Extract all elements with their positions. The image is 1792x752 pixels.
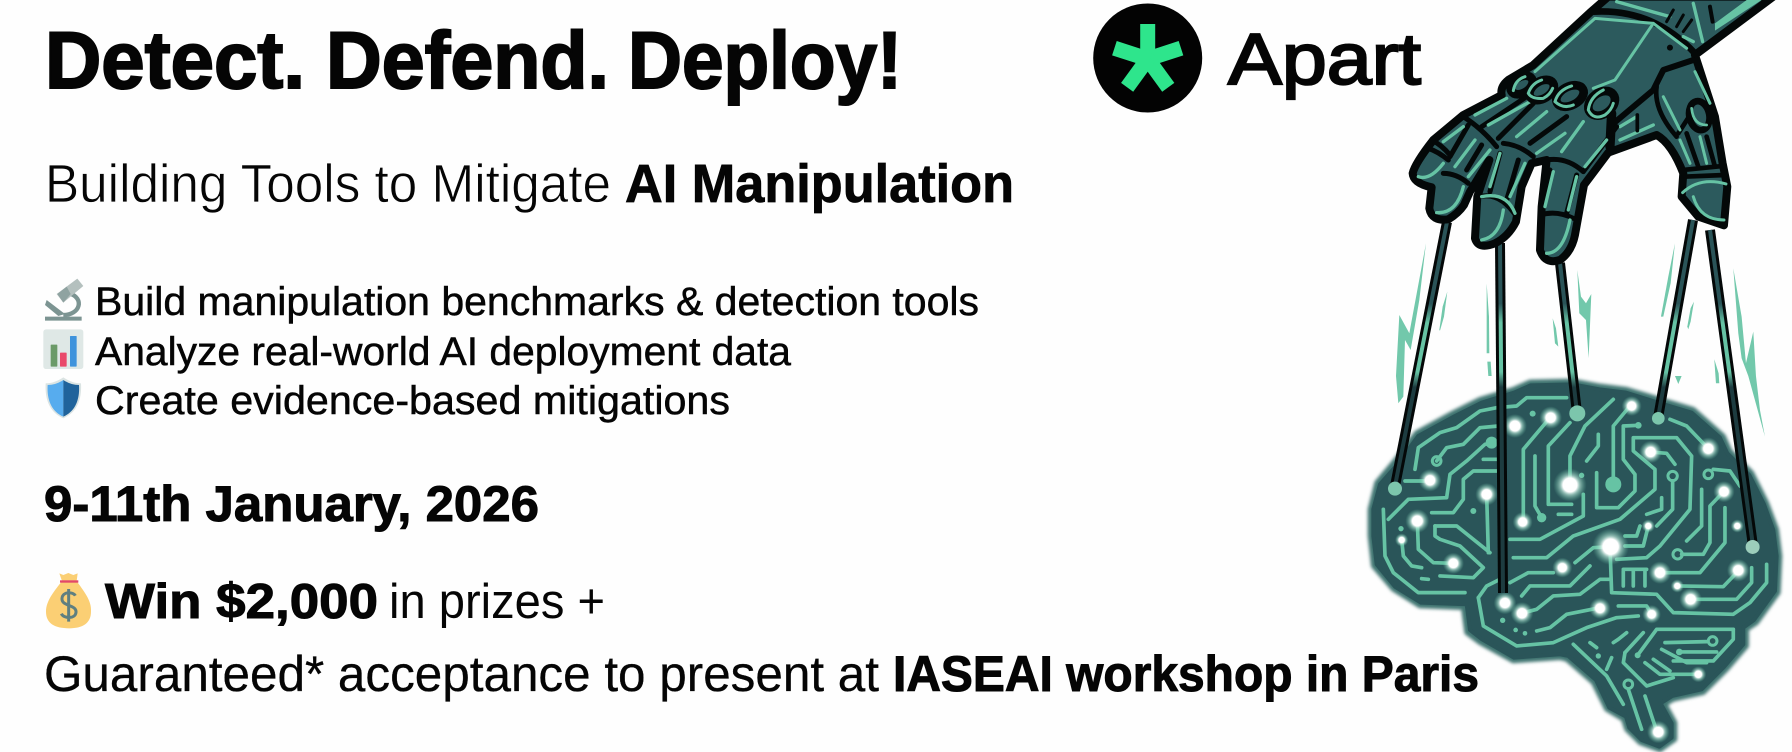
thumb: [1656, 72, 1726, 220]
prize line: in prizes +: [389, 575, 605, 629]
prize line: Win $2,000: [105, 575, 378, 629]
circuit traces: [1383, 398, 1767, 731]
workshop acceptance line: [44, 646, 1479, 702]
string 4: [1658, 220, 1693, 418]
lightning sparks: [1396, 243, 1765, 437]
icon: bar chart: [43, 329, 83, 369]
title: Defend.: [326, 16, 609, 106]
bullet: benchmarks: Build manipulation benchmarks & detection tools: [95, 280, 979, 324]
icon: shield: [46, 377, 81, 418]
logo wordmark: Apart: [1228, 20, 1421, 100]
robotic hand: [1413, 0, 1773, 261]
glowing nodes: [1395, 396, 1750, 743]
string anchor nodes: [1388, 405, 1760, 607]
puppet strings: [1395, 220, 1753, 593]
prize line: [105, 575, 605, 629]
subtitle: Building Tools to Mitigate: [45, 154, 611, 214]
palm and wrist details: [1535, 0, 1762, 147]
string 5: [1710, 230, 1753, 546]
icon: microscope: [45, 279, 83, 321]
workshop acceptance line: IASEAI workshop in Paris: [893, 646, 1479, 702]
icon: money bag: [46, 573, 91, 628]
title: Deploy!: [628, 16, 902, 106]
subtitle: [45, 154, 1014, 214]
string 1: [1395, 222, 1447, 486]
ring nodes: [1432, 457, 1717, 689]
bullet: mitigations: Create evidence-based mitigations: [95, 379, 730, 423]
workshop acceptance line: Guaranteed* acceptance to present at: [44, 646, 879, 702]
event date: 9-11th January, 2026: [44, 476, 539, 532]
string 2: [1500, 243, 1503, 593]
logo mark: [1093, 4, 1202, 112]
string 3: [1560, 263, 1577, 413]
subtitle: AI Manipulation: [625, 154, 1014, 214]
bullet: deployment data: Analyze real-world AI deployment data: [95, 330, 792, 374]
title: Detect.: [45, 16, 305, 106]
knuckles: [1507, 72, 1620, 121]
fingers: [1418, 72, 1620, 253]
title: [45, 16, 902, 106]
solid nodes: [1398, 411, 1683, 659]
logo: Apart: [1093, 4, 1421, 112]
circuit brain: [1370, 381, 1780, 750]
